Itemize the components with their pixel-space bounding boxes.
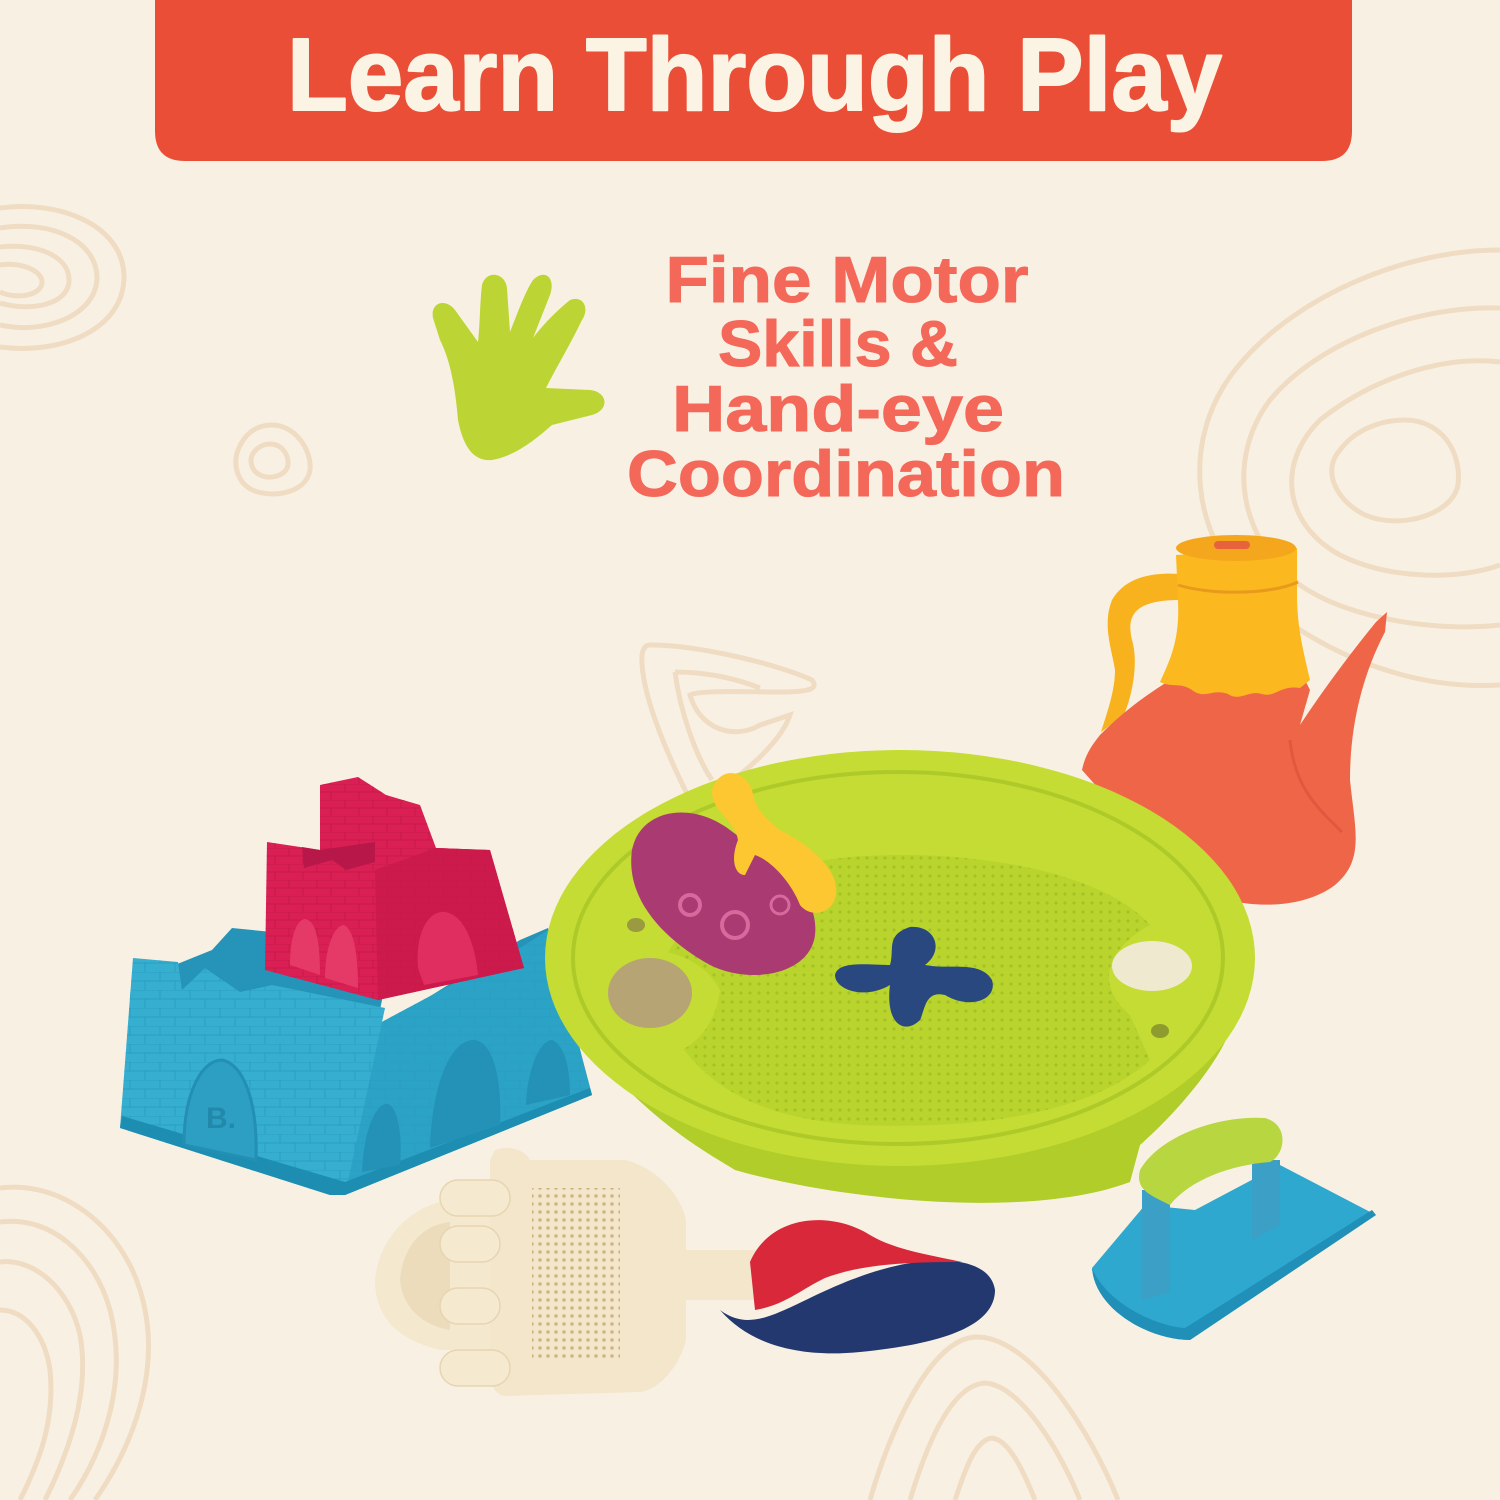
- text: fine motor skills: Coordination: [627, 437, 1065, 510]
- toy: rake handle: [720, 1220, 995, 1353]
- text: fine motor skills: Skills &: [718, 307, 958, 380]
- toy: blue iron trowel: [1092, 1118, 1376, 1340]
- toy: navy star: [835, 927, 993, 1027]
- castle door letter: B.: [206, 1102, 236, 1135]
- text: fine motor skills: Hand-eye: [672, 372, 1004, 445]
- toy: lime tray: [545, 750, 1255, 1203]
- toy: watering can: [1082, 535, 1387, 905]
- text: fine motor skills: Fine Motor: [666, 243, 1028, 316]
- toy: blue castle: [120, 928, 592, 1195]
- title banner: [155, 0, 1352, 161]
- toy: cream rake: [375, 1148, 995, 1396]
- toy: purple spinner with yellow handle: [631, 773, 836, 975]
- icon: green hand: [433, 275, 605, 460]
- title: Learn Through Play: [287, 17, 1222, 132]
- text: fine motor skills: [627, 243, 1065, 510]
- toy: red castle: [265, 777, 524, 1000]
